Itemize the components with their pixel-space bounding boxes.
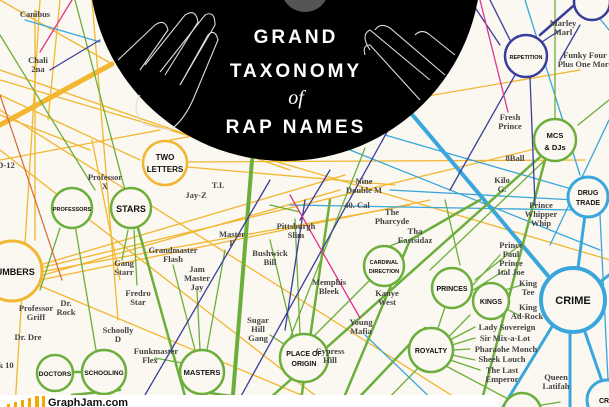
title text: GRAND xyxy=(254,27,338,48)
title text xyxy=(226,27,366,138)
rapper name labels: Master xyxy=(184,273,210,283)
rapper name labels: Emperor xyxy=(486,374,519,384)
node: place of origin: ORIGIN xyxy=(292,361,316,368)
rapper name labels: The Last xyxy=(486,365,518,375)
node: repetition xyxy=(505,35,547,77)
rapper name labels: Dr. xyxy=(60,298,72,308)
rapper name labels: Tha xyxy=(408,226,423,236)
title text: RAP NAMES xyxy=(226,117,366,138)
rapper name labels: Flex xyxy=(142,355,159,365)
rapper name labels: Lady Sovereign xyxy=(479,322,536,332)
node: masters: MASTERS xyxy=(184,368,220,377)
rapper name labels: Sugar xyxy=(247,315,269,325)
rapper name labels: King xyxy=(519,302,538,312)
rapper name labels: Schoolly xyxy=(103,325,134,335)
node: cardinal direction xyxy=(364,246,404,286)
node: princes xyxy=(432,268,472,308)
node: doctors: DOCTORS xyxy=(39,371,72,378)
node: crime: CRIME xyxy=(555,295,591,307)
rapper name labels: Chali xyxy=(28,55,49,65)
node: drug trade: TRADE xyxy=(576,200,600,207)
rapper name labels: D xyxy=(115,334,121,344)
rapper name labels: Funkmaster xyxy=(134,346,178,356)
node: doctors xyxy=(37,355,73,391)
node: professors: PROFESSORS xyxy=(53,207,91,213)
rapper name labels: Latifah xyxy=(543,381,570,391)
rapper name labels: West xyxy=(378,297,396,307)
node: two letters xyxy=(143,141,187,185)
node: crime partial xyxy=(587,380,609,407)
rapper name labels: G. xyxy=(498,184,506,194)
node: cardinal direction: DIRECTION xyxy=(369,269,399,275)
rapper name labels: The xyxy=(385,207,399,217)
rapper name labels: Sheek Louch xyxy=(478,354,526,364)
rapper name labels: Prince xyxy=(499,240,523,250)
node: schooling xyxy=(82,350,126,394)
title text: TAXONOMY xyxy=(230,61,362,82)
node: mcs & djs: & DJs xyxy=(544,143,566,152)
rapper name labels: Sir Mix-a-Lot xyxy=(480,333,530,343)
rapper name labels: Young xyxy=(349,317,373,327)
node: crime xyxy=(541,268,605,332)
rapper name labels: Queen xyxy=(544,372,568,382)
rapper name labels: Dr. Dre xyxy=(15,332,42,342)
rapper name labels: Bleek xyxy=(319,286,339,296)
node: place of origin xyxy=(280,334,328,382)
node: two letters: LETTERS xyxy=(147,165,184,174)
node: place of origin: PLACE OF xyxy=(286,351,322,358)
node: stars xyxy=(111,188,151,228)
rapper name labels: Nine xyxy=(356,176,373,186)
rapper name labels: Griff xyxy=(27,312,45,322)
node: professors xyxy=(52,188,92,228)
title text: of xyxy=(288,87,306,109)
rapper name labels: Memphis xyxy=(312,277,347,287)
node: schooling: SCHOOLING xyxy=(84,370,124,377)
node: stars: STARS xyxy=(116,204,146,214)
rapper name labels: Starr xyxy=(114,267,134,277)
node: princes: PRINCES xyxy=(436,286,468,293)
node: kings xyxy=(473,283,509,319)
node: mcs & djs xyxy=(534,119,576,161)
node: drug trade xyxy=(568,177,608,217)
rapper name labels: Professor xyxy=(19,303,53,313)
node: top right partial xyxy=(574,0,609,20)
rapper name labels: Kanye xyxy=(375,288,399,298)
rapper name labels: Bushwick xyxy=(252,248,288,258)
rapper name labels: Kilo xyxy=(494,175,510,185)
rapper name labels: Fredro xyxy=(125,288,151,298)
rapper name labels: Ital Joe xyxy=(497,267,525,277)
rapper name labels: Jay xyxy=(191,282,204,292)
node: cardinal direction: CARDINAL xyxy=(370,260,399,266)
node: drug trade: DRUG xyxy=(578,190,599,197)
rapper name labels: T.I. xyxy=(212,180,224,190)
node: royalty: ROYALTY xyxy=(415,348,447,355)
node: royalty xyxy=(409,328,453,372)
rapper name labels: Marl xyxy=(554,27,573,37)
rapper name labels: Flash xyxy=(163,254,183,264)
icon: bar logo xyxy=(7,396,45,407)
record label xyxy=(281,0,329,12)
rapper name labels: Funky Four xyxy=(563,50,607,60)
rapper name labels: Star xyxy=(130,297,146,307)
rapper name labels: Grandmaster xyxy=(148,245,198,255)
rapper name labels: Hill xyxy=(323,355,337,365)
rapper name labels: Prince xyxy=(499,258,523,268)
rapper name labels: Marley xyxy=(550,18,577,28)
rapper name labels: Prince xyxy=(529,200,553,210)
rapper name labels: Double M xyxy=(346,185,382,195)
rapper name labels: Whip xyxy=(531,218,551,228)
rapper name labels: Jay-Z xyxy=(185,190,207,200)
rapper name labels: Bill xyxy=(264,257,277,267)
rapper name labels: Pittsburgh xyxy=(277,221,316,231)
rapper name labels: Gang xyxy=(114,258,135,268)
rapper name labels: Jam xyxy=(189,264,205,274)
rapper name labels: Fresh xyxy=(500,112,521,122)
footer: GraphJam logo xyxy=(0,395,498,407)
rapper name labels: Mafia xyxy=(350,326,373,336)
rapper name labels: Prince xyxy=(498,121,522,131)
rapper name labels: Whipper xyxy=(525,209,558,219)
rapper name labels: Professor xyxy=(88,172,122,182)
rapper name labels: Ad-Rock xyxy=(511,311,544,321)
rapper name labels: Cypress xyxy=(315,346,345,356)
node: kings: KINGS xyxy=(480,299,502,306)
icon: right hand xyxy=(364,25,455,100)
node: repetition: REPETITION xyxy=(509,55,543,61)
rapper name labels: King xyxy=(519,278,538,288)
node: masters xyxy=(180,350,224,394)
rapper name labels: 40. Cal xyxy=(344,200,370,210)
icon: left hand xyxy=(118,13,218,130)
rapper name labels: Pharaohe Monch xyxy=(475,344,538,354)
node: queen partial xyxy=(503,393,541,407)
rapper name labels: Paul xyxy=(503,249,520,259)
rapper name labels: P xyxy=(229,238,235,248)
rapper name labels: 8Ball xyxy=(506,153,525,163)
rapper name labels: Pharcyde xyxy=(375,216,409,226)
rapper name labels: 2na xyxy=(31,64,45,74)
node: two letters: TWO xyxy=(156,153,174,162)
node: mcs & djs: MCS xyxy=(547,131,563,140)
rapper name labels: Rock xyxy=(57,307,76,317)
rapper name labels: Tee xyxy=(522,287,534,297)
rapper name labels: X xyxy=(102,181,109,191)
title disc xyxy=(89,0,481,161)
rapper name labels: Gang xyxy=(248,333,269,343)
rapper name labels: Slim xyxy=(288,230,304,240)
rapper name labels: Master xyxy=(219,229,245,239)
node: numbers xyxy=(0,241,42,301)
rapper name labels: Hill xyxy=(251,324,265,334)
rapper name labels: Canibus xyxy=(20,9,51,19)
rapper name labels: Eastsidaz xyxy=(398,235,432,245)
